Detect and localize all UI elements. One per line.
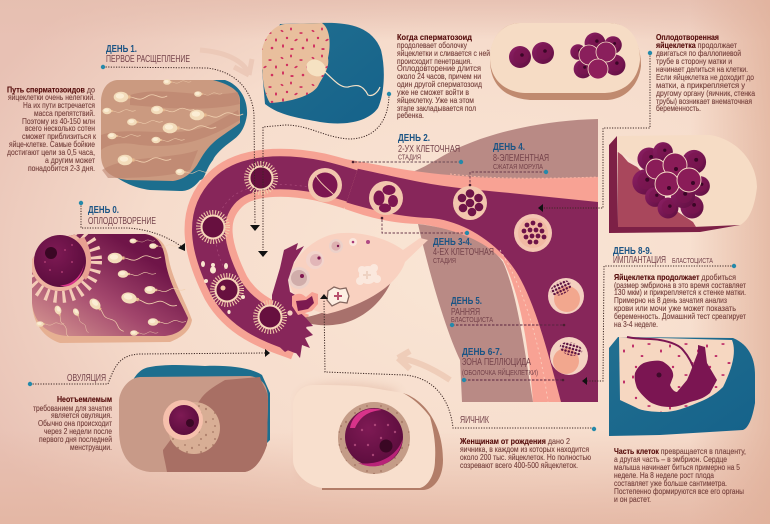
connector: day 3-4 <box>382 219 467 233</box>
text: ovaries: около 200 тыс. яйцеклеток. Но полностью <box>460 452 591 462</box>
label: day 3-4: ДЕНЬ 3-4. <box>433 237 472 248</box>
text: penetration: Оплодовторение длится <box>397 63 481 73</box>
label: day 6-7: (ОБОЛОЧКА ЯЙЦЕКЛЕТКИ) <box>462 368 538 377</box>
connector: implantation <box>586 266 734 381</box>
connector: morula <box>542 53 650 208</box>
text: penetration: происходит пенетрация. <box>397 56 472 66</box>
text: penetration: один другой сперматозоид <box>397 79 482 89</box>
text: ovaries: яичника, в каждом из которых находится <box>460 444 589 454</box>
label: day 2: 2-УХ КЛЕТОЧНАЯ <box>398 144 460 155</box>
text: ovaries: Женщинам от рождения дано 2 <box>459 436 570 446</box>
text: sperm journey: а другим может <box>45 155 95 165</box>
connector: day 0 <box>81 203 182 247</box>
panel: fertilization sperm <box>32 234 192 343</box>
text: fertilized egg <box>656 32 755 113</box>
label: day 4: ДЕНЬ 4. <box>493 142 525 153</box>
connector: penetration <box>263 94 389 250</box>
text: placenta and embryo: Часть клеток превращается в плаценту, <box>614 446 746 456</box>
label: day 3-4: 4-ЕХ КЛЕТОЧНАЯ <box>433 247 494 258</box>
connector dot and arrow: ovulation <box>28 349 270 386</box>
text: ovulation: является овуляция. <box>51 410 112 420</box>
text: placenta and embryo: а другая часть – в эмбрион. Сердце <box>614 454 727 464</box>
text: penetration: около 24 часов, причем ни <box>397 71 481 81</box>
text: ovulation: менструации. <box>70 442 112 452</box>
text: penetration: уже не сможет войти в <box>397 87 469 97</box>
panel: embryo implantation <box>609 337 755 436</box>
label: day 2: СТАДИЯ <box>398 154 421 162</box>
follicles <box>288 238 381 306</box>
fallopian tube <box>209 173 352 338</box>
connector dots: day 2 <box>352 160 463 164</box>
connector dots: day 3-4 <box>381 217 469 235</box>
connector dots: day 6-7 <box>462 378 564 382</box>
text: fertilized egg: начинает делиться на клетки. <box>656 64 748 74</box>
text: penetration: яйцеклетку. Уже на этом <box>397 95 474 105</box>
label: day 5: ДЕНЬ 5. <box>451 296 482 307</box>
text: ovaries <box>459 436 591 470</box>
text: ovaries: созревают всего 400-500 яйцеклеток. <box>460 460 578 470</box>
label: day 5: БЛАСТОЦИСТА <box>451 317 493 324</box>
panel: ovulation <box>119 365 270 472</box>
text: ovulation: Обычно она происходит <box>38 418 112 428</box>
panel: penetration <box>262 23 384 123</box>
text: sperm journey: На их пути встречается <box>23 100 95 110</box>
text: placenta and embryo: неделе. На 8 неделе рост плода <box>614 470 714 480</box>
text: implantation <box>614 272 746 329</box>
text: ovulation <box>33 394 112 452</box>
text: sperm journey: Путь сперматозоидов до <box>7 84 95 94</box>
text: placenta and embryo: составляет уже больше сантиметра. <box>614 478 727 488</box>
label: day 0: ОПЛОДОТВОРЕНИЕ <box>88 216 156 227</box>
label: day 1 <box>106 44 190 65</box>
text: ovulation: первого дня последней <box>39 434 112 444</box>
fimbriae <box>272 243 313 358</box>
label: day 6-7 <box>462 347 538 377</box>
label: day 4 <box>493 142 549 171</box>
label: day 4: 8-ЭЛЕМЕНТНАЯ <box>493 153 549 164</box>
connector dot and arrow: penetration <box>258 92 391 257</box>
panel: morula close-up <box>609 135 757 233</box>
connector: ovulation <box>30 353 265 384</box>
text: sperm journey: сможет приблизиться к <box>22 131 96 141</box>
connector: day 2 <box>353 161 461 163</box>
text: sperm journey: масса препятствий. <box>34 108 95 118</box>
blastomere cluster <box>632 142 710 219</box>
text: sperm journey <box>7 84 96 173</box>
connector: ovary <box>324 300 594 428</box>
connector: day 5 <box>452 324 563 326</box>
label: day 3-4 <box>433 237 494 265</box>
connector: day 6-7 <box>464 379 562 381</box>
text: penetration <box>397 32 490 120</box>
text: implantation: крови или мочи уже может показать <box>614 303 736 313</box>
label: ovary: ЯИЧНИК <box>460 415 489 426</box>
label: day 8-9: ИМПЛАНТАЦИЯ <box>613 255 666 266</box>
corpus luteum <box>287 292 318 316</box>
connector: day 4 <box>470 172 546 184</box>
text: fertilized egg: беременность. <box>656 103 701 113</box>
connector: day 1 <box>103 67 255 224</box>
text: fertilized egg: двигаться по фаллопиевой <box>656 48 741 58</box>
text: placenta and embryo: и он растет. <box>614 494 651 504</box>
connector dot and arrow: morula <box>538 51 652 212</box>
text: fertilized egg: Оплодотворенная <box>656 32 719 42</box>
uterus <box>345 119 598 402</box>
panel: dividing cells <box>490 23 641 100</box>
text: sperm journey: яйце-клетке. Самые бойкие <box>9 139 95 149</box>
arrow: faded curved arrow top <box>200 50 252 75</box>
text: sperm journey: всего несколько сотен <box>25 123 95 133</box>
connector dots: day 4 <box>469 170 548 186</box>
text: implantation: Примерно на 8 день зачатия анализ <box>614 295 727 305</box>
text: ovulation: Неотъемлемым <box>57 394 112 404</box>
sperm in tube <box>201 261 245 314</box>
embryo <box>627 337 717 407</box>
connector dot and arrow: day 1 <box>101 65 260 231</box>
text: penetration: продолевает оболочку <box>397 40 468 50</box>
label: ovulation: ОВУЛЯЦИЯ <box>67 373 106 384</box>
label: day 8-9: ДЕНЬ 8-9. <box>613 246 652 257</box>
label: day 2 <box>398 133 460 162</box>
text: sperm journey: Поэтому из 40-150 млн <box>22 116 95 126</box>
text: penetration: ребенка. <box>397 110 424 120</box>
text: fertilized egg: трубе в сторону матки и <box>656 56 732 66</box>
text: sperm journey: яйцеклетки очень нелегкий. <box>8 92 95 102</box>
label: day 8-9: БЛАСТОЦИСТА <box>672 258 713 265</box>
label: day 5: РАННЯЯ <box>451 307 480 318</box>
label: day 1: ДЕНЬ 1. <box>106 44 137 55</box>
label: day 2: ДЕНЬ 2. <box>398 133 430 144</box>
connector dot and arrow: implantation <box>582 264 736 385</box>
text: ovulation: требованием для зачатия <box>33 403 112 413</box>
connector dots: day 5 <box>450 323 565 327</box>
connector dot and arrow: day 0 <box>79 201 185 251</box>
text: fertilized egg: матки, а прикрепляется у <box>656 80 746 90</box>
label: day 0 <box>88 205 156 227</box>
label: day 5 <box>451 296 493 324</box>
text: implantation: Яйцеклетка продолжает дробиться <box>614 272 736 282</box>
label: day 8-9 <box>613 246 713 266</box>
label: day 3-4: СТАДИЯ <box>433 258 456 265</box>
label: day 6-7: ЗОНА ПЕЛЛЮЦИДА <box>462 357 531 368</box>
panel: sperm path <box>101 79 247 191</box>
connector dot and arrow: ovary <box>320 294 596 431</box>
text: ovulation: через 2 недели после <box>44 426 112 436</box>
eight-cell cluster <box>570 33 625 79</box>
text: fertilized egg: яйцеклетка продолжает <box>656 40 737 50</box>
text: sperm journey: понадобится 2-3 дня. <box>28 163 95 173</box>
arrow: faded curved arrow bottom <box>398 351 450 380</box>
eggs in tube <box>198 164 588 375</box>
text: penetration: этапе закладывается пол <box>397 103 476 113</box>
text: penetration: Когда сперматозоид <box>397 32 473 42</box>
text: implantation: на 3-4 неделе. <box>614 319 658 329</box>
label: day 0: ДЕНЬ 0. <box>88 205 119 216</box>
panel: ovarian egg <box>293 383 443 490</box>
text: penetration: яйцеклетки и сливается с ней <box>397 48 490 58</box>
label: day 1: ПЕРВОЕ РАСЩЕПЛЕНИЕ <box>106 54 190 65</box>
label: day 6-7: ДЕНЬ 6-7. <box>462 347 502 358</box>
text: sperm journey: достигают цели за 0,5 часа, <box>7 147 95 157</box>
ovary <box>288 233 428 325</box>
text: placenta and embryo <box>614 446 746 504</box>
label: day 4: СЖАТАЯ МОРУЛА <box>493 164 543 171</box>
